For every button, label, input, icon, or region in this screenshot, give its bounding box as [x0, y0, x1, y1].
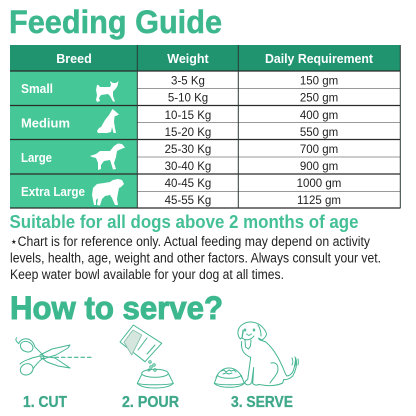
breed column: Extra Large — [21, 185, 85, 199]
disclaimer note — [10, 234, 381, 282]
data cells: 5-10 Kg — [168, 92, 208, 104]
icon: small dog — [96, 81, 118, 102]
data cells: 25-30 Kg — [165, 144, 211, 156]
how to serve heading: How to serve? — [10, 290, 223, 326]
icon: sitting dog with food bowl — [214, 322, 298, 387]
table header: Weight — [167, 52, 210, 66]
data cells: 10-15 Kg — [165, 110, 211, 122]
data cells: 250 gm — [300, 92, 338, 104]
breed column — [10, 71, 137, 208]
data cells: 45-55 Kg — [165, 195, 211, 207]
breed column: Medium — [21, 116, 70, 130]
title: Feeding Guide — [9, 4, 222, 40]
table header: Breed — [56, 52, 92, 66]
suitability heading: Suitable for all dogs above 2 months of age — [10, 212, 358, 232]
data cells: 15-20 Kg — [165, 127, 211, 139]
disclaimer note: Keep water bowl available for your dog at all times. — [10, 267, 284, 282]
table header — [10, 45, 400, 71]
step labels: 1. CUT — [23, 394, 67, 411]
feeding table — [10, 45, 400, 208]
data cells: 40-45 Kg — [165, 178, 211, 190]
data cells: 1125 gm — [297, 195, 341, 207]
breed column: Large — [21, 151, 52, 165]
data cells: 3-5 Kg — [171, 76, 205, 88]
data cells: 550 gm — [300, 127, 338, 139]
icon: large dog — [90, 144, 125, 170]
icon: medium dog — [97, 109, 119, 133]
data cells — [137, 71, 400, 208]
disclaimer note: ⋆Chart is for reference only. Actual feeding may depend on activity — [10, 234, 370, 249]
data cells: 400 gm — [300, 110, 338, 122]
step labels: 2. POUR — [122, 394, 179, 411]
step labels — [23, 394, 293, 411]
breed column: Small — [21, 82, 53, 96]
icon: pouring food pack into bowl — [120, 325, 173, 388]
icon: extra large dog — [92, 179, 124, 206]
data cells: 700 gm — [300, 144, 338, 156]
table header: Daily Requirement — [265, 52, 374, 66]
data cells: 150 gm — [300, 76, 338, 88]
data cells: 1000 gm — [297, 178, 341, 190]
data cells: 30-40 Kg — [165, 161, 211, 173]
disclaimer note: levels, health, age, weight and other factors. Always consult your vet. — [10, 250, 381, 266]
data cells: 900 gm — [300, 161, 338, 173]
icon: scissors cut — [16, 338, 92, 377]
step labels: 3. SERVE — [231, 394, 293, 411]
